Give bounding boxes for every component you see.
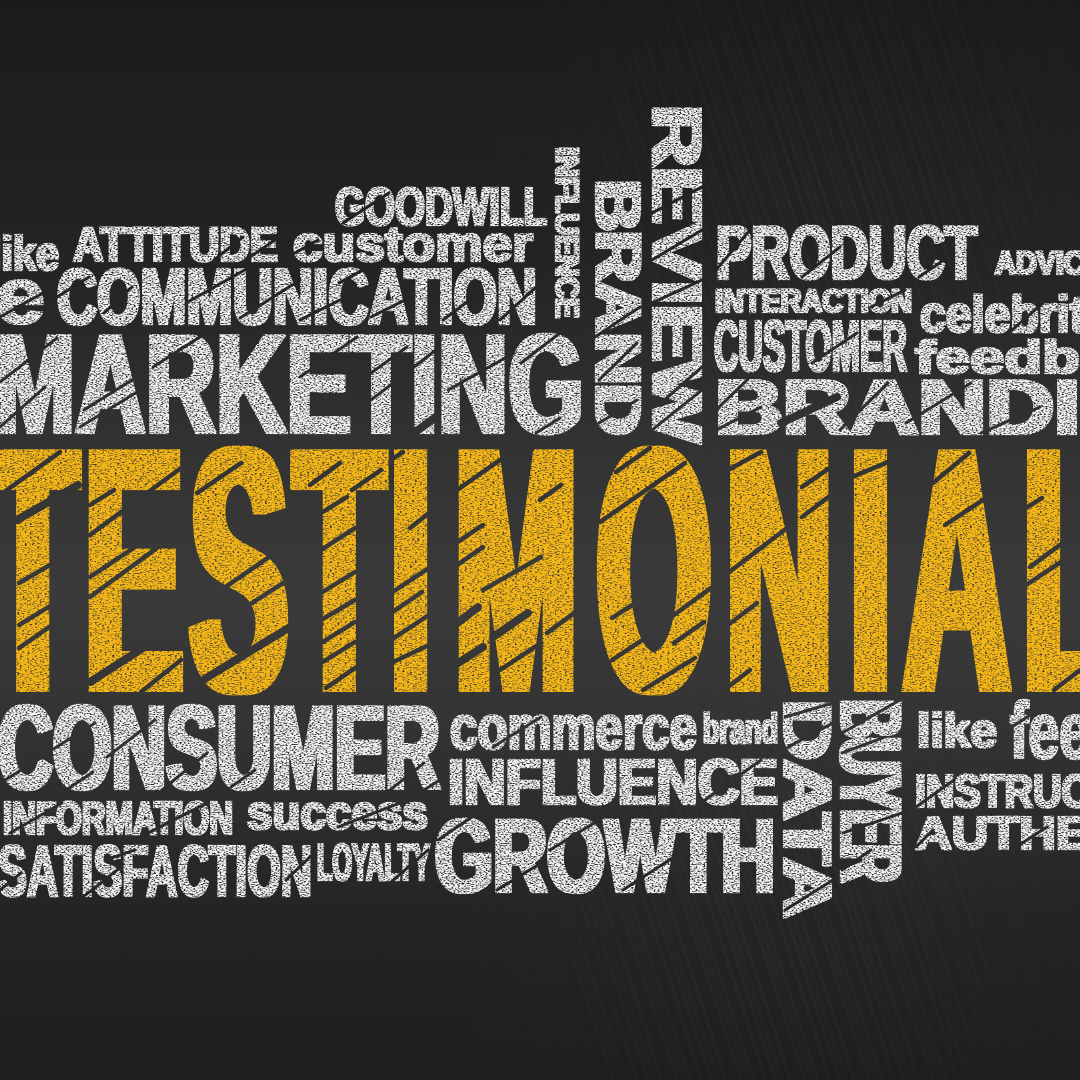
word: success: success (247, 787, 428, 840)
word: SATISFACTION: SATISFACTION (0, 832, 312, 912)
word: ATTITUDE: ATTITUDE (73, 219, 278, 272)
white word layer (0, 105, 1080, 918)
lower word group (0, 681, 1080, 918)
word: INFORMATION: INFORMATION (3, 792, 233, 844)
word: brand: brand (703, 705, 778, 752)
word: GOODWILL: GOODWILL (335, 177, 547, 237)
vertical word: BRAND: BRAND (582, 180, 654, 435)
vertical word: DATA: DATA (769, 700, 845, 918)
vertical word: INFLUENCE: INFLUENCE (549, 147, 585, 318)
word: commerce: commerce (450, 694, 697, 763)
chalkboard background (0, 176, 1080, 998)
word: INTERACTION: INTERACTION (715, 283, 912, 319)
word: CONSUMER: CONSUMER (0, 681, 440, 815)
word: INFLUENCE: INFLUENCE (448, 746, 778, 818)
word: like: like (917, 705, 997, 758)
word: MARKETING: MARKETING (0, 305, 584, 464)
lower word group: LOYALTY (317, 834, 430, 892)
word: COMMUNICATION: COMMUNICATION (57, 252, 537, 341)
vertical word: REVIEW: REVIEW (638, 105, 716, 442)
word: GROWTH: GROWTH (435, 798, 775, 915)
upper word group (0, 105, 1080, 464)
word cloud (0, 105, 1080, 918)
vertical word: BUYER: BUYER (822, 700, 918, 882)
word: customer: customer (293, 216, 533, 272)
